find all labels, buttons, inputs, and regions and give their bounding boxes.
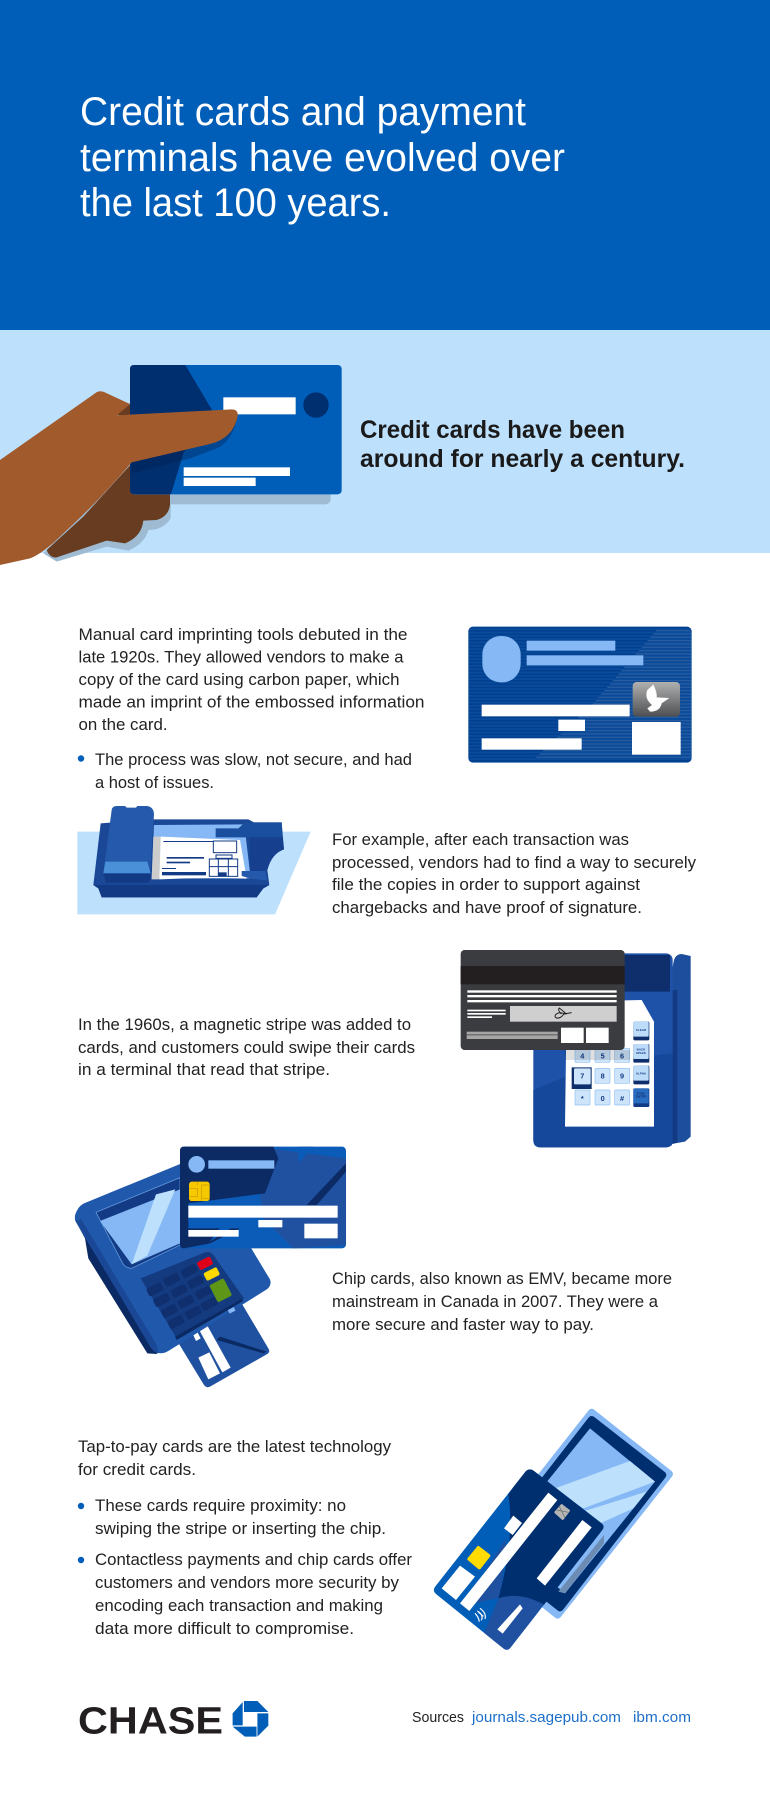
text block: example: chargebacks and have proof of signature. — [332, 898, 642, 917]
title: the last 100 years. — [80, 181, 391, 225]
text block: manual imprinting: a host of issues. — [95, 773, 214, 792]
text block: example: file the copies in order to support against — [332, 875, 640, 894]
icon: magnetic stripe terminal and card: 4 — [580, 1051, 585, 1060]
header panel — [0, 0, 770, 330]
icon: magnetic stripe terminal and card: ENTER — [636, 1095, 647, 1099]
icon: magnetic stripe terminal and card: CLEAR — [636, 1028, 647, 1032]
text block: example: For example, after each transaction was — [332, 830, 629, 849]
text block: tap to pay — [78, 1437, 412, 1638]
text block: tap to pay: These cards require proximity: no — [95, 1496, 346, 1515]
text block: chip cards: mainstream in Canada in 2007. They were a — [332, 1292, 659, 1311]
text block: magnetic stripe: In the 1960s, a magnetic stripe was added to — [78, 1015, 411, 1034]
sources: ibm.com — [633, 1709, 691, 1726]
sources — [412, 1709, 691, 1726]
text block: tap to pay: data more difficult to compromise. — [95, 1619, 354, 1638]
text block: manual imprinting: copy of the card using carbon paper, which — [78, 670, 400, 689]
sources: journals.sagepub.com — [471, 1709, 621, 1726]
icon: chip card terminal — [75, 1147, 346, 1387]
icon: magnetic stripe terminal and card: 7 — [580, 1072, 584, 1081]
icon: magnetic stripe terminal and card: 0 — [601, 1094, 605, 1103]
text block: magnetic stripe — [78, 1015, 415, 1079]
text block: magnetic stripe: cards, and customers could swipe their cards — [78, 1038, 415, 1057]
heading: intro — [360, 416, 685, 473]
icon: magnetic stripe terminal and card: FUNC — [637, 1091, 646, 1095]
icon: manual imprinter — [77, 806, 311, 914]
text block: manual imprinting — [78, 625, 425, 792]
logo: Chase: CHASE — [78, 1700, 223, 1742]
icon: magnetic stripe terminal and card: ALPHA — [636, 1071, 647, 1075]
text block: manual imprinting: Manual card imprinting tools debuted in the — [78, 625, 408, 644]
heading: intro: around for nearly a century. — [360, 445, 685, 473]
icon: magnetic stripe terminal and card: BACK — [637, 1048, 646, 1052]
logo: Chase — [78, 1700, 268, 1742]
text block: example: processed, vendors had to find a way to securely — [332, 853, 696, 872]
icon: magnetic stripe terminal and card: SPACE — [636, 1051, 646, 1055]
heading: intro: Credit cards have been — [360, 416, 625, 444]
icon: magnetic stripe terminal and card: 5 — [601, 1051, 605, 1060]
icon: phone and tap card — [420, 1412, 669, 1662]
text block: manual imprinting: on the card. — [78, 715, 168, 734]
icon: hand holding card — [0, 365, 342, 565]
icon: magnetic stripe terminal and card: * — [581, 1094, 584, 1103]
text block: chip cards: more secure and faster way to pay. — [332, 1315, 594, 1334]
text block: tap to pay: customers and vendors more security by — [95, 1573, 399, 1592]
text block: tap to pay: for credit cards. — [78, 1460, 196, 1479]
text block: manual imprinting: The process was slow, not secure, and had — [95, 750, 412, 769]
text block: chip cards: Chip cards, also known as EMV, became more — [332, 1269, 672, 1288]
title — [80, 90, 565, 225]
icon: magnetic stripe terminal and card: 6 — [620, 1051, 624, 1060]
title: Credit cards and payment — [80, 90, 526, 134]
text block: magnetic stripe: in a terminal that read that stripe. — [78, 1060, 330, 1079]
text block: chip cards — [332, 1269, 672, 1334]
sources: Sources — [412, 1709, 464, 1726]
text block: tap to pay: swiping the stripe or inserting the chip. — [95, 1519, 386, 1538]
text block: manual imprinting: late 1920s. They allowed vendors to make a — [78, 648, 404, 666]
title: terminals have evolved over — [80, 136, 565, 180]
icon: magnetic stripe terminal and card: 9 — [620, 1072, 624, 1081]
panel: intro band — [0, 330, 770, 553]
text block: manual imprinting: made an imprint of the embossed information — [78, 692, 424, 712]
icon: embossed card — [468, 627, 692, 763]
text block: tap to pay: Tap-to-pay cards are the latest technology — [78, 1437, 391, 1456]
icon: magnetic stripe terminal and card — [461, 950, 691, 1147]
icon: magnetic stripe terminal and card: # — [620, 1094, 624, 1103]
text block: example — [332, 830, 696, 917]
text block: tap to pay: encoding each transaction and making — [95, 1596, 383, 1615]
icon: magnetic stripe terminal and card: 8 — [601, 1072, 605, 1081]
text block: tap to pay: Contactless payments and chip cards offer — [95, 1550, 412, 1569]
icon: Chase octagon — [233, 1701, 268, 1737]
